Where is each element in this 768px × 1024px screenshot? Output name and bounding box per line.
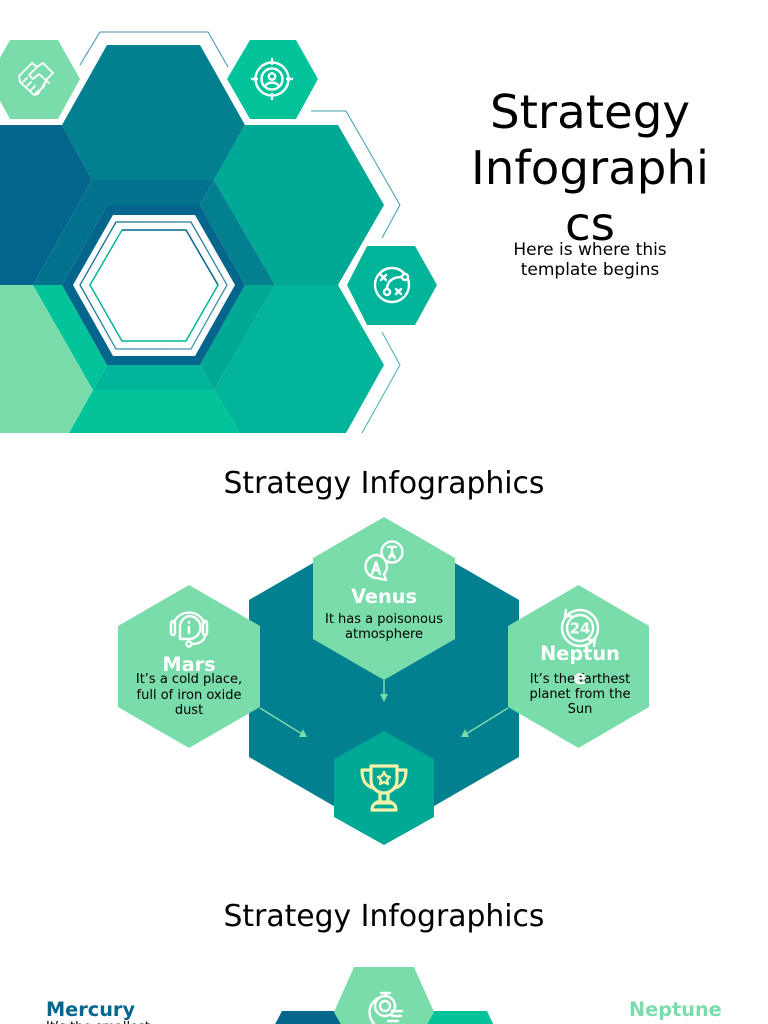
icon: hand with target <box>370 993 402 1024</box>
title: Strategy <box>490 86 690 140</box>
icon: 24 hour clock: 24 <box>570 620 590 638</box>
hexagon: dark blue core <box>62 205 245 365</box>
small hexagon: strategy play <box>347 246 437 325</box>
icon: headset info <box>171 613 207 647</box>
subtitle: template begins <box>521 260 659 280</box>
arrow: Venus to trophy <box>380 680 388 702</box>
icon: strategy play <box>375 268 409 302</box>
hexagon: central teal backdrop <box>249 522 519 835</box>
hexagon: green lower right <box>214 285 384 433</box>
ring segment: lower right <box>200 285 275 390</box>
hexagon: inner thin line <box>90 230 218 341</box>
text: Neptune description: Sun <box>568 702 592 717</box>
text: Mars description: It’s a cold place, <box>136 672 242 687</box>
panel: trophy <box>334 731 434 845</box>
heading: section three: Strategy Infographics <box>224 899 544 934</box>
icon: trophy <box>362 766 406 810</box>
hexagon: white centre <box>73 215 235 356</box>
label: Mercury: Mercury <box>46 998 135 1021</box>
subtitle: Here is where this <box>513 240 667 260</box>
text: Venus description: atmosphere <box>345 627 423 642</box>
name: Mars: Mars <box>162 653 216 676</box>
icon: 24 hour clock <box>562 610 598 646</box>
text: Venus description <box>325 612 443 642</box>
outline: top bracket <box>80 32 228 67</box>
icon: target person <box>252 59 292 99</box>
hexagon: dark blue left <box>0 125 92 285</box>
text: Mars description <box>136 672 242 718</box>
panel: Mars <box>118 585 260 748</box>
arrow: Neptune to trophy <box>461 708 508 737</box>
text: Mars description: full of iron oxide <box>137 688 241 703</box>
text: Neptune description <box>529 672 631 717</box>
hexagon: mint top <box>334 967 434 1024</box>
hexagon: green lower <box>418 1011 496 1024</box>
hexagon: outer thin line <box>80 222 227 349</box>
subtitle <box>513 240 667 280</box>
ring segment: top right <box>200 180 275 285</box>
hexagon: mint lower left <box>0 285 93 433</box>
text: Neptune description: planet from the <box>529 687 631 702</box>
name: Neptune <box>540 642 620 689</box>
panel: Venus <box>313 517 455 680</box>
panel: Neptune <box>508 585 649 748</box>
icon: speech bubbles <box>366 542 402 580</box>
name: Neptune: e <box>573 666 587 689</box>
name: Neptune: Neptun <box>540 642 620 665</box>
outline: right bracket upper <box>311 111 400 238</box>
hexagon: blue lower <box>272 1011 350 1024</box>
label: Neptune: Neptune <box>629 998 722 1021</box>
heading: section two: Strategy Infographics <box>224 466 544 501</box>
text: Neptune description: It’s the farthest <box>530 672 630 687</box>
title: cs <box>565 198 615 252</box>
text: Venus description: It has a poisonous <box>325 612 443 627</box>
hexagon: green upper right <box>214 125 384 285</box>
hexagon: teal top <box>62 45 245 180</box>
name: Venus: Venus <box>351 585 417 608</box>
title: Infographi <box>471 142 709 196</box>
ring segment: top left <box>33 180 214 285</box>
text: Mars description: dust <box>175 703 203 718</box>
ring segment: lower left <box>33 285 107 390</box>
small hexagon: handshake <box>0 40 80 119</box>
icon: handshake <box>19 63 53 95</box>
small hexagon: target person <box>227 40 318 119</box>
panel: hexagon cluster <box>0 45 384 433</box>
hexagon: bright green bottom <box>69 390 240 433</box>
title <box>471 86 709 252</box>
ring segment: bottom <box>93 365 214 390</box>
outline: right bracket lower <box>362 332 400 433</box>
arrow: Mars to trophy <box>260 708 307 737</box>
